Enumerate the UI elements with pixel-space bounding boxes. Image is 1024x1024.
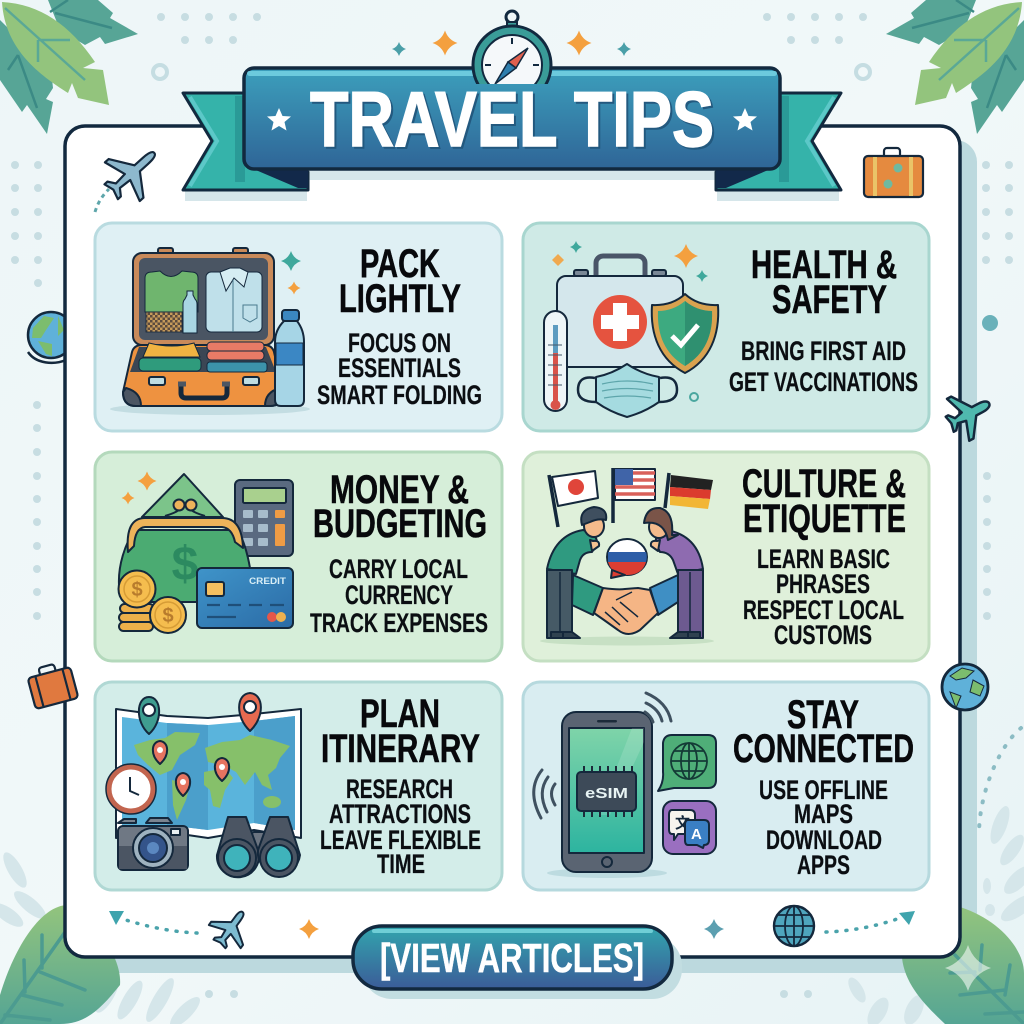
text: money and budgeting tips	[310, 554, 488, 638]
card shadow	[80, 140, 977, 973]
button shadow	[362, 936, 682, 999]
text: plan itinerary tips: RESEARCH	[346, 774, 453, 804]
panel: money and budgeting	[95, 452, 502, 661]
icon: airplane top left	[94, 134, 172, 212]
title banner ribbon	[183, 11, 841, 201]
heading: culture and etiquette: ETIQUETTE	[743, 497, 906, 541]
decorative pale foliage	[0, 804, 1024, 1024]
panel: health and safety	[523, 223, 929, 431]
icon: open suitcase and water bottle	[110, 248, 310, 415]
text: pack lightly tips: SMART FOLDING	[317, 380, 482, 410]
icon: flags, bowing people, handshake	[540, 468, 714, 646]
heading: pack lightly: PACK	[360, 242, 440, 286]
text: money and budgeting tips: CARRY LOCAL	[329, 554, 468, 584]
heading: money and budgeting: BUDGETING	[313, 502, 487, 546]
icon: compass	[472, 10, 552, 84]
text: stay connected tips: MAPS	[794, 799, 853, 829]
star left	[267, 108, 291, 130]
view articles button: [VIEW ARTICLES]	[380, 935, 644, 981]
world globe left edge	[28, 312, 74, 363]
panel: pack lightly	[95, 223, 502, 431]
icon: airplane bottom	[204, 901, 258, 955]
icon: airplane right edge	[939, 382, 1000, 445]
leaf cluster top right	[886, 0, 1024, 134]
heading: stay connected: CONNECTED	[733, 727, 914, 771]
icon: purse, calculator, coins, credit card: $	[172, 538, 199, 591]
icon: purse, calculator, coins, credit card: CREDIT	[249, 576, 286, 587]
text: culture and etiquette tips: CUSTOMS	[774, 620, 872, 650]
star right	[733, 108, 757, 130]
text: plan itinerary tips	[320, 774, 481, 879]
icon: phone with eSIM, globe and translate bubbles: 文	[675, 814, 690, 832]
text: plan itinerary tips: TIME	[377, 849, 425, 879]
icon: phone with eSIM, globe and translate bubbles: eSIM	[585, 785, 628, 802]
text: culture and etiquette tips: PHRASES	[776, 569, 870, 599]
title text: TRAVEL TIPS	[310, 75, 714, 163]
icon: purse, calculator, coins, credit card	[118, 472, 293, 633]
heading: pack lightly: LIGHTLY	[339, 277, 461, 321]
sparkle watermark	[945, 945, 991, 991]
icon: globe bottom	[774, 906, 814, 946]
text: plan itinerary tips: LEAVE FLEXIBLE	[320, 825, 481, 855]
title text: TRAVEL TIPS	[312, 77, 716, 165]
text: stay connected tips	[759, 775, 888, 880]
leaves bottom right	[902, 907, 1024, 1024]
main white card	[65, 126, 960, 957]
sparkle teal bottom	[704, 919, 724, 939]
bottom flight path left	[109, 911, 197, 933]
icon: purse, calculator, coins, credit card: $	[162, 605, 174, 627]
heading: pack lightly	[339, 242, 461, 321]
text: pack lightly tips: ESSENTIALS	[338, 353, 461, 383]
top sparkles	[392, 30, 631, 56]
text: money and budgeting tips: CURRENCY	[345, 580, 453, 610]
leaf cluster top left	[0, 0, 138, 134]
heading: stay connected: STAY	[787, 693, 859, 737]
heading: culture and etiquette: CULTURE &	[742, 462, 906, 506]
leaves bottom left	[0, 905, 120, 1024]
view articles button	[353, 926, 672, 989]
sparkle orange bottom	[299, 919, 319, 939]
panel: stay connected	[523, 682, 929, 890]
text: health and safety tips	[729, 336, 918, 397]
text: health and safety tips: GET VACCINATIONS	[729, 367, 918, 397]
heading: health and safety	[751, 243, 897, 322]
panel: plan itinerary	[95, 682, 502, 890]
icon: purse, calculator, coins, credit card: $	[131, 579, 143, 601]
bottom flight path right	[826, 911, 915, 932]
heading: plan itinerary: ITINERARY	[321, 727, 480, 771]
icon: globe right edge	[942, 664, 988, 710]
heading: culture and etiquette	[742, 462, 906, 541]
text: culture and etiquette tips	[743, 544, 904, 650]
text: pack lightly tips	[317, 328, 482, 410]
heading: money and budgeting: MONEY &	[330, 468, 469, 512]
heading: stay connected	[733, 693, 914, 771]
text: culture and etiquette tips: LEARN BASIC	[757, 544, 890, 574]
dotted flight arc right margin	[979, 728, 1021, 832]
text: money and budgeting tips: TRACK EXPENSES	[310, 608, 488, 638]
heading: money and budgeting	[313, 468, 487, 546]
icon: phone with eSIM, globe and translate bubbles	[534, 693, 716, 878]
text: health and safety tips: BRING FIRST AID	[741, 336, 906, 366]
icon: map, pins, clock, camera, binoculars	[106, 693, 301, 877]
text: plan itinerary tips: ATTRACTIONS	[329, 799, 471, 829]
icon: first aid kit, shield, thermometer, mask	[544, 241, 718, 417]
text: stay connected tips: USE OFFLINE	[759, 775, 888, 805]
text: stay connected tips: DOWNLOAD	[766, 825, 882, 855]
text: pack lightly tips: FOCUS ON	[348, 328, 451, 358]
text: stay connected tips: APPS	[797, 850, 850, 880]
panel: culture and etiquette	[523, 452, 929, 661]
heading: health and safety: HEALTH &	[751, 243, 897, 287]
heading: plan itinerary	[321, 692, 480, 771]
icon: suitcase left edge	[26, 660, 78, 709]
icon: suitcase top right	[864, 148, 923, 197]
heading: plan itinerary: PLAN	[360, 692, 440, 736]
text: culture and etiquette tips: RESPECT LOCAL	[743, 595, 904, 625]
icon: phone with eSIM, globe and translate bubbles: A	[691, 826, 702, 843]
heading: health and safety: SAFETY	[772, 278, 887, 322]
